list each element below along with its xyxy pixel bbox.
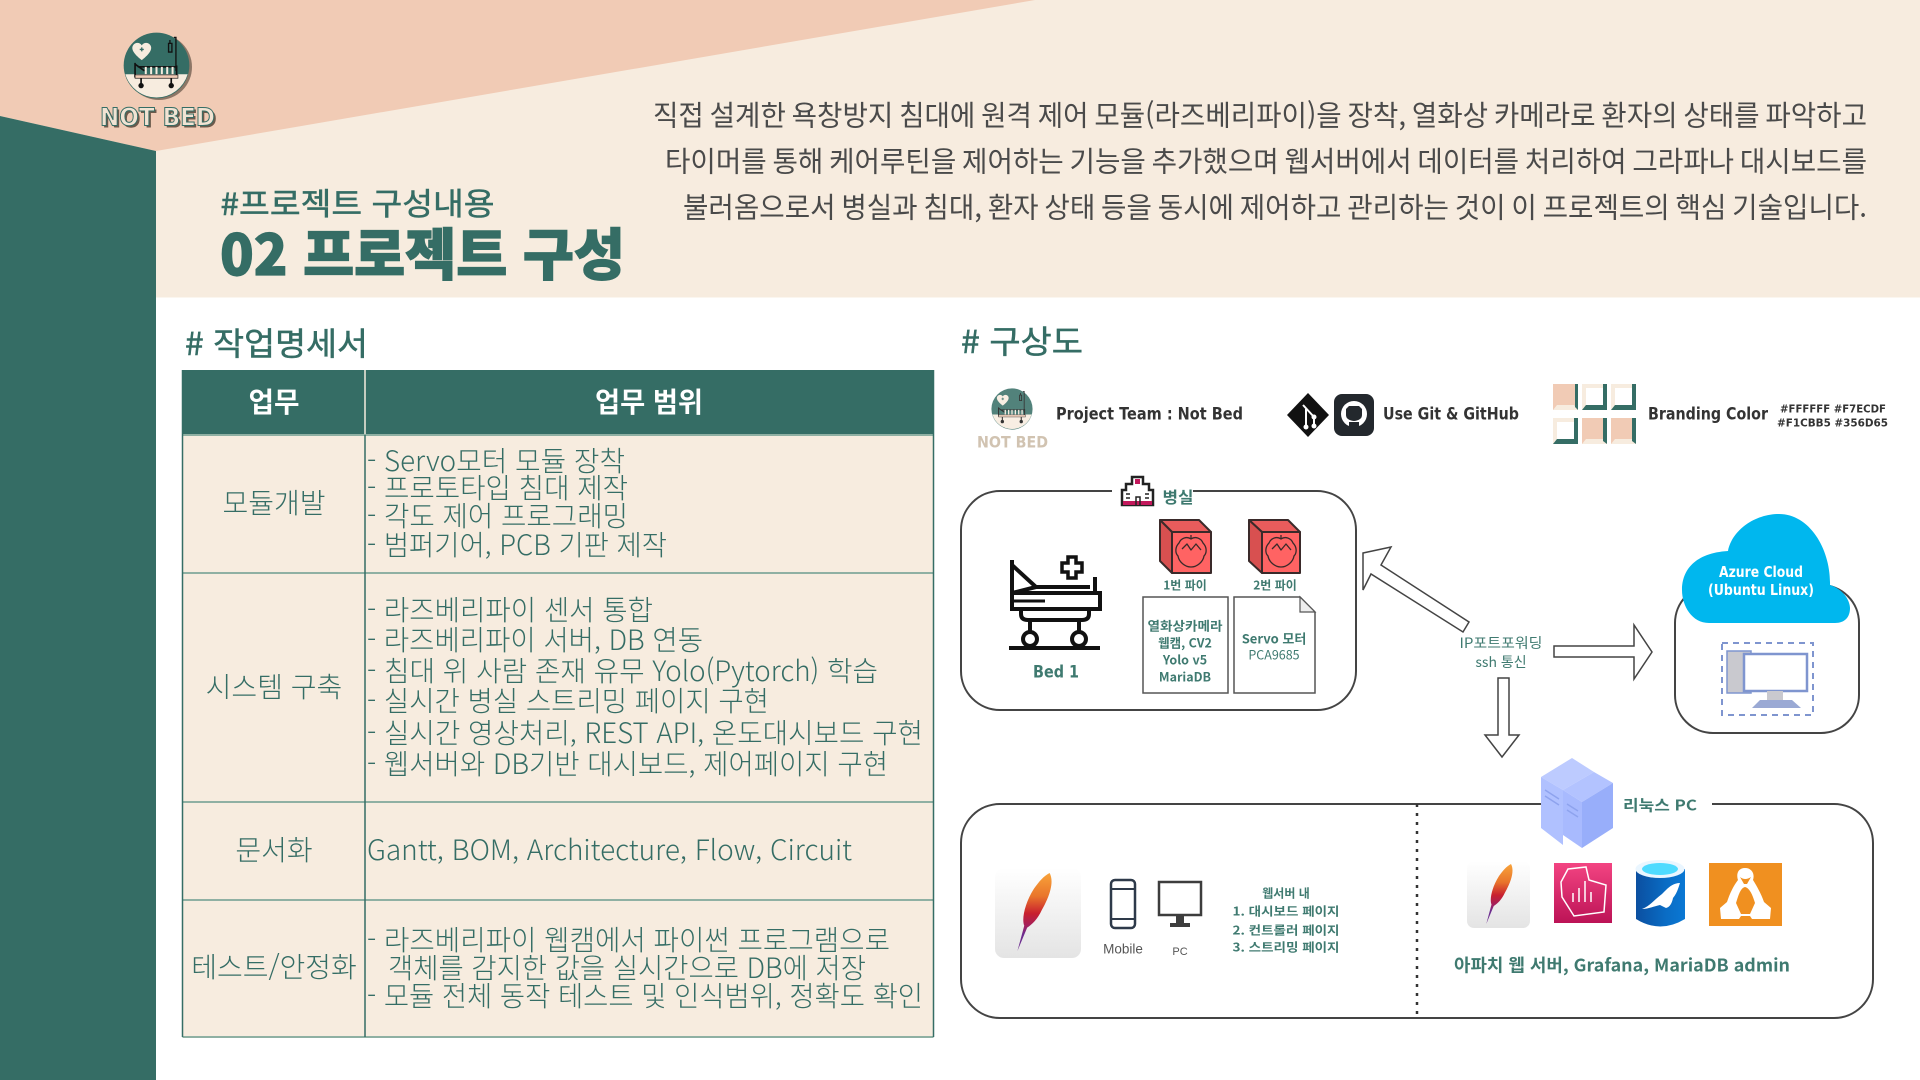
panel: work specification table (182, 370, 934, 1037)
row: system build: - 라즈베리파이 센서 통합 (367, 589, 653, 629)
icon: linux (1709, 863, 1782, 926)
row: system build: - 웹서버와 DB기반 대시보드, 제어페이지 구현 (367, 743, 888, 783)
text: branding colour: Branding Color (1648, 404, 1769, 424)
row: system build: - 라즈베리파이 서버, DB 연동 (367, 619, 703, 659)
arrow: to linux pc (1485, 678, 1519, 757)
text: mobile: Mobile (1103, 942, 1143, 956)
row: test and stabilization: - 모듈 전체 동작 테스트 및 인식범위, 정확도 확인 (367, 975, 923, 1015)
icon: apache tile (1467, 861, 1530, 928)
text: linux pc label: 리눅스 PC (1623, 794, 1697, 816)
icon: git (1287, 393, 1329, 437)
heading: section subtitle: #프로젝트 구성내용 (220, 179, 494, 224)
text: services caption: 아파치 웹 서버, Grafana, MariaDB admin (1454, 952, 1790, 978)
icon: server towers (1541, 758, 1613, 848)
row: module development: - 각도 제어 프로그래밍 (367, 495, 628, 535)
background: green side band (0, 116, 156, 1080)
panel: pi 2 document (1234, 597, 1315, 693)
icon: github (1334, 394, 1374, 436)
row: system build: 시스템 구축 (206, 666, 342, 706)
row: test and stabilization: 객체를 감지한 값을 실시간으로 DB에 저장 (388, 947, 866, 987)
panel: hospital room (961, 477, 1356, 710)
text: git and github: Use Git & GitHub (1383, 404, 1519, 424)
icon: apache feather tile (995, 868, 1081, 958)
row: module development (222, 440, 667, 564)
text block: project description (653, 94, 1867, 226)
panel: pi 2 document: PCA9685 (1248, 644, 1300, 664)
text block: project description: 불러옴으로서 병실과 침대, 환자 상태 등을 동시에 제어하고 관리하는 것이 이 프로젝트의 핵심 기술입니다. (683, 186, 1867, 226)
icon: server desktop (1722, 643, 1813, 715)
text: pi 2 label: 2번 파이 (1253, 576, 1297, 594)
row: system build: - 실시간 영상처리, REST API, 온도대시보드 구현 (367, 712, 923, 752)
row: module development: 모듈개발 (222, 482, 326, 522)
icon: hospital (1122, 477, 1153, 505)
row: system build: - 침대 위 사람 존재 유무 Yolo(Pytorch) 학습 (367, 650, 878, 690)
icon: grafana (1554, 863, 1612, 923)
row: documentation: Gantt, BOM, Architecture, Flow, Circuit (367, 829, 852, 869)
panel: project info row (977, 384, 1888, 452)
heading: title: 02 프로젝트 구성 (220, 211, 625, 292)
table header (182, 370, 934, 435)
panel: pi 1 document: Yolo v5 (1162, 650, 1207, 668)
icon: branding colour swatches (1553, 384, 1636, 444)
text: colour codes (1777, 402, 1888, 430)
text: pi 1 label: 1번 파이 (1163, 576, 1207, 594)
panel: pi 1 document: MariaDB (1159, 666, 1211, 686)
icon: raspberry pi 1 (1160, 520, 1211, 573)
panel: pi 1 document (1143, 597, 1228, 693)
text: cloud label: (Ubuntu Linux) (1708, 581, 1814, 599)
text: cloud label: Azure Cloud (1719, 563, 1803, 581)
row: test and stabilization (191, 919, 923, 1015)
panel: linux pc (961, 758, 1873, 1018)
background: header band (0, 0, 1920, 298)
panel: pi 1 document: 웹캠, CV2 (1158, 632, 1212, 652)
row: system build (206, 589, 923, 783)
text: web server pages: 웹서버 내 (1262, 884, 1310, 902)
icon: raspberry pi 2 (1249, 520, 1300, 573)
text: colour codes: #FFFFFF #F7ECDF (1780, 402, 1886, 416)
text: web server pages: 2. 컨트롤러 페이지 (1232, 922, 1340, 938)
row: documentation: 문서화 (235, 829, 313, 869)
panel: pi 2 document: Servo 모터 (1242, 628, 1306, 648)
text: web server pages: 3. 스트리밍 페이지 (1232, 938, 1340, 956)
background: pink wedge (0, 0, 1035, 151)
text: port forwarding label: IP포트포워딩 (1460, 633, 1542, 653)
logo: Not Bed: NOT BED (102, 104, 217, 134)
table header: 업무 (248, 381, 300, 421)
icon: mobile (1111, 880, 1135, 928)
arrow: to hospital room (1363, 547, 1469, 632)
text block: project description: 직접 설계한 욕창방지 침대에 원격 제어 모듈(라즈베리파이)을 장착, 열화상 카메라로 환자의 상태를 파악하고 (653, 94, 1867, 134)
text: bed 1: Bed 1 (1033, 662, 1079, 682)
panel: pi 1 document: 열화상카메라 (1148, 616, 1223, 634)
icon: mariadb (1636, 860, 1685, 926)
icon: small logo (977, 388, 1048, 452)
heading: work specification: # 작업명세서 (185, 319, 368, 365)
row: test and stabilization: - 라즈베리파이 웹캠에서 파이썬 프로그램으로 (367, 919, 890, 959)
text block: project description: 타이머를 통해 케어루틴을 제어하는 기능을 추가했으며 웹서버에서 데이터를 처리하여 그라파나 대시보드를 (665, 140, 1867, 180)
logo: Not Bed (100, 33, 217, 134)
text: web server pages (1232, 884, 1340, 956)
icon: small logo: NOT BED (977, 432, 1048, 452)
text: web server pages: 1. 대시보드 페이지 (1232, 902, 1340, 920)
table header: 업무 범위 (595, 381, 703, 421)
row: module development: - 범퍼기어, PCB 기판 제작 (367, 524, 667, 564)
icon: hospital bed (1009, 557, 1100, 648)
row: module development: - 프로토타입 침대 제작 (367, 467, 628, 507)
text: port forwarding label: ssh 통신 (1475, 652, 1527, 672)
panel: azure cloud (1675, 514, 1859, 733)
logo: Not Bed: NOT BED (100, 102, 215, 132)
icon: cloud (1682, 514, 1850, 623)
arrow: to cloud (1554, 625, 1652, 679)
row: test and stabilization: 테스트/안정화 (191, 946, 357, 986)
heading: architecture diagram: # 구상도 (961, 317, 1083, 363)
text: port forwarding label (1460, 633, 1542, 672)
text: colour codes: #F1CBB5 #356D65 (1777, 416, 1888, 430)
icon: pc monitor (1159, 882, 1201, 927)
text: room label: 병실 (1162, 484, 1194, 508)
row: system build: - 실시간 병실 스트리밍 페이지 구현 (367, 680, 769, 720)
text: pc: PC (1172, 946, 1188, 958)
text: project team: Project Team : Not Bed (1056, 404, 1243, 424)
row: module development: - Servo모터 모듈 장착 (367, 440, 625, 480)
text: cloud label (1708, 563, 1814, 599)
